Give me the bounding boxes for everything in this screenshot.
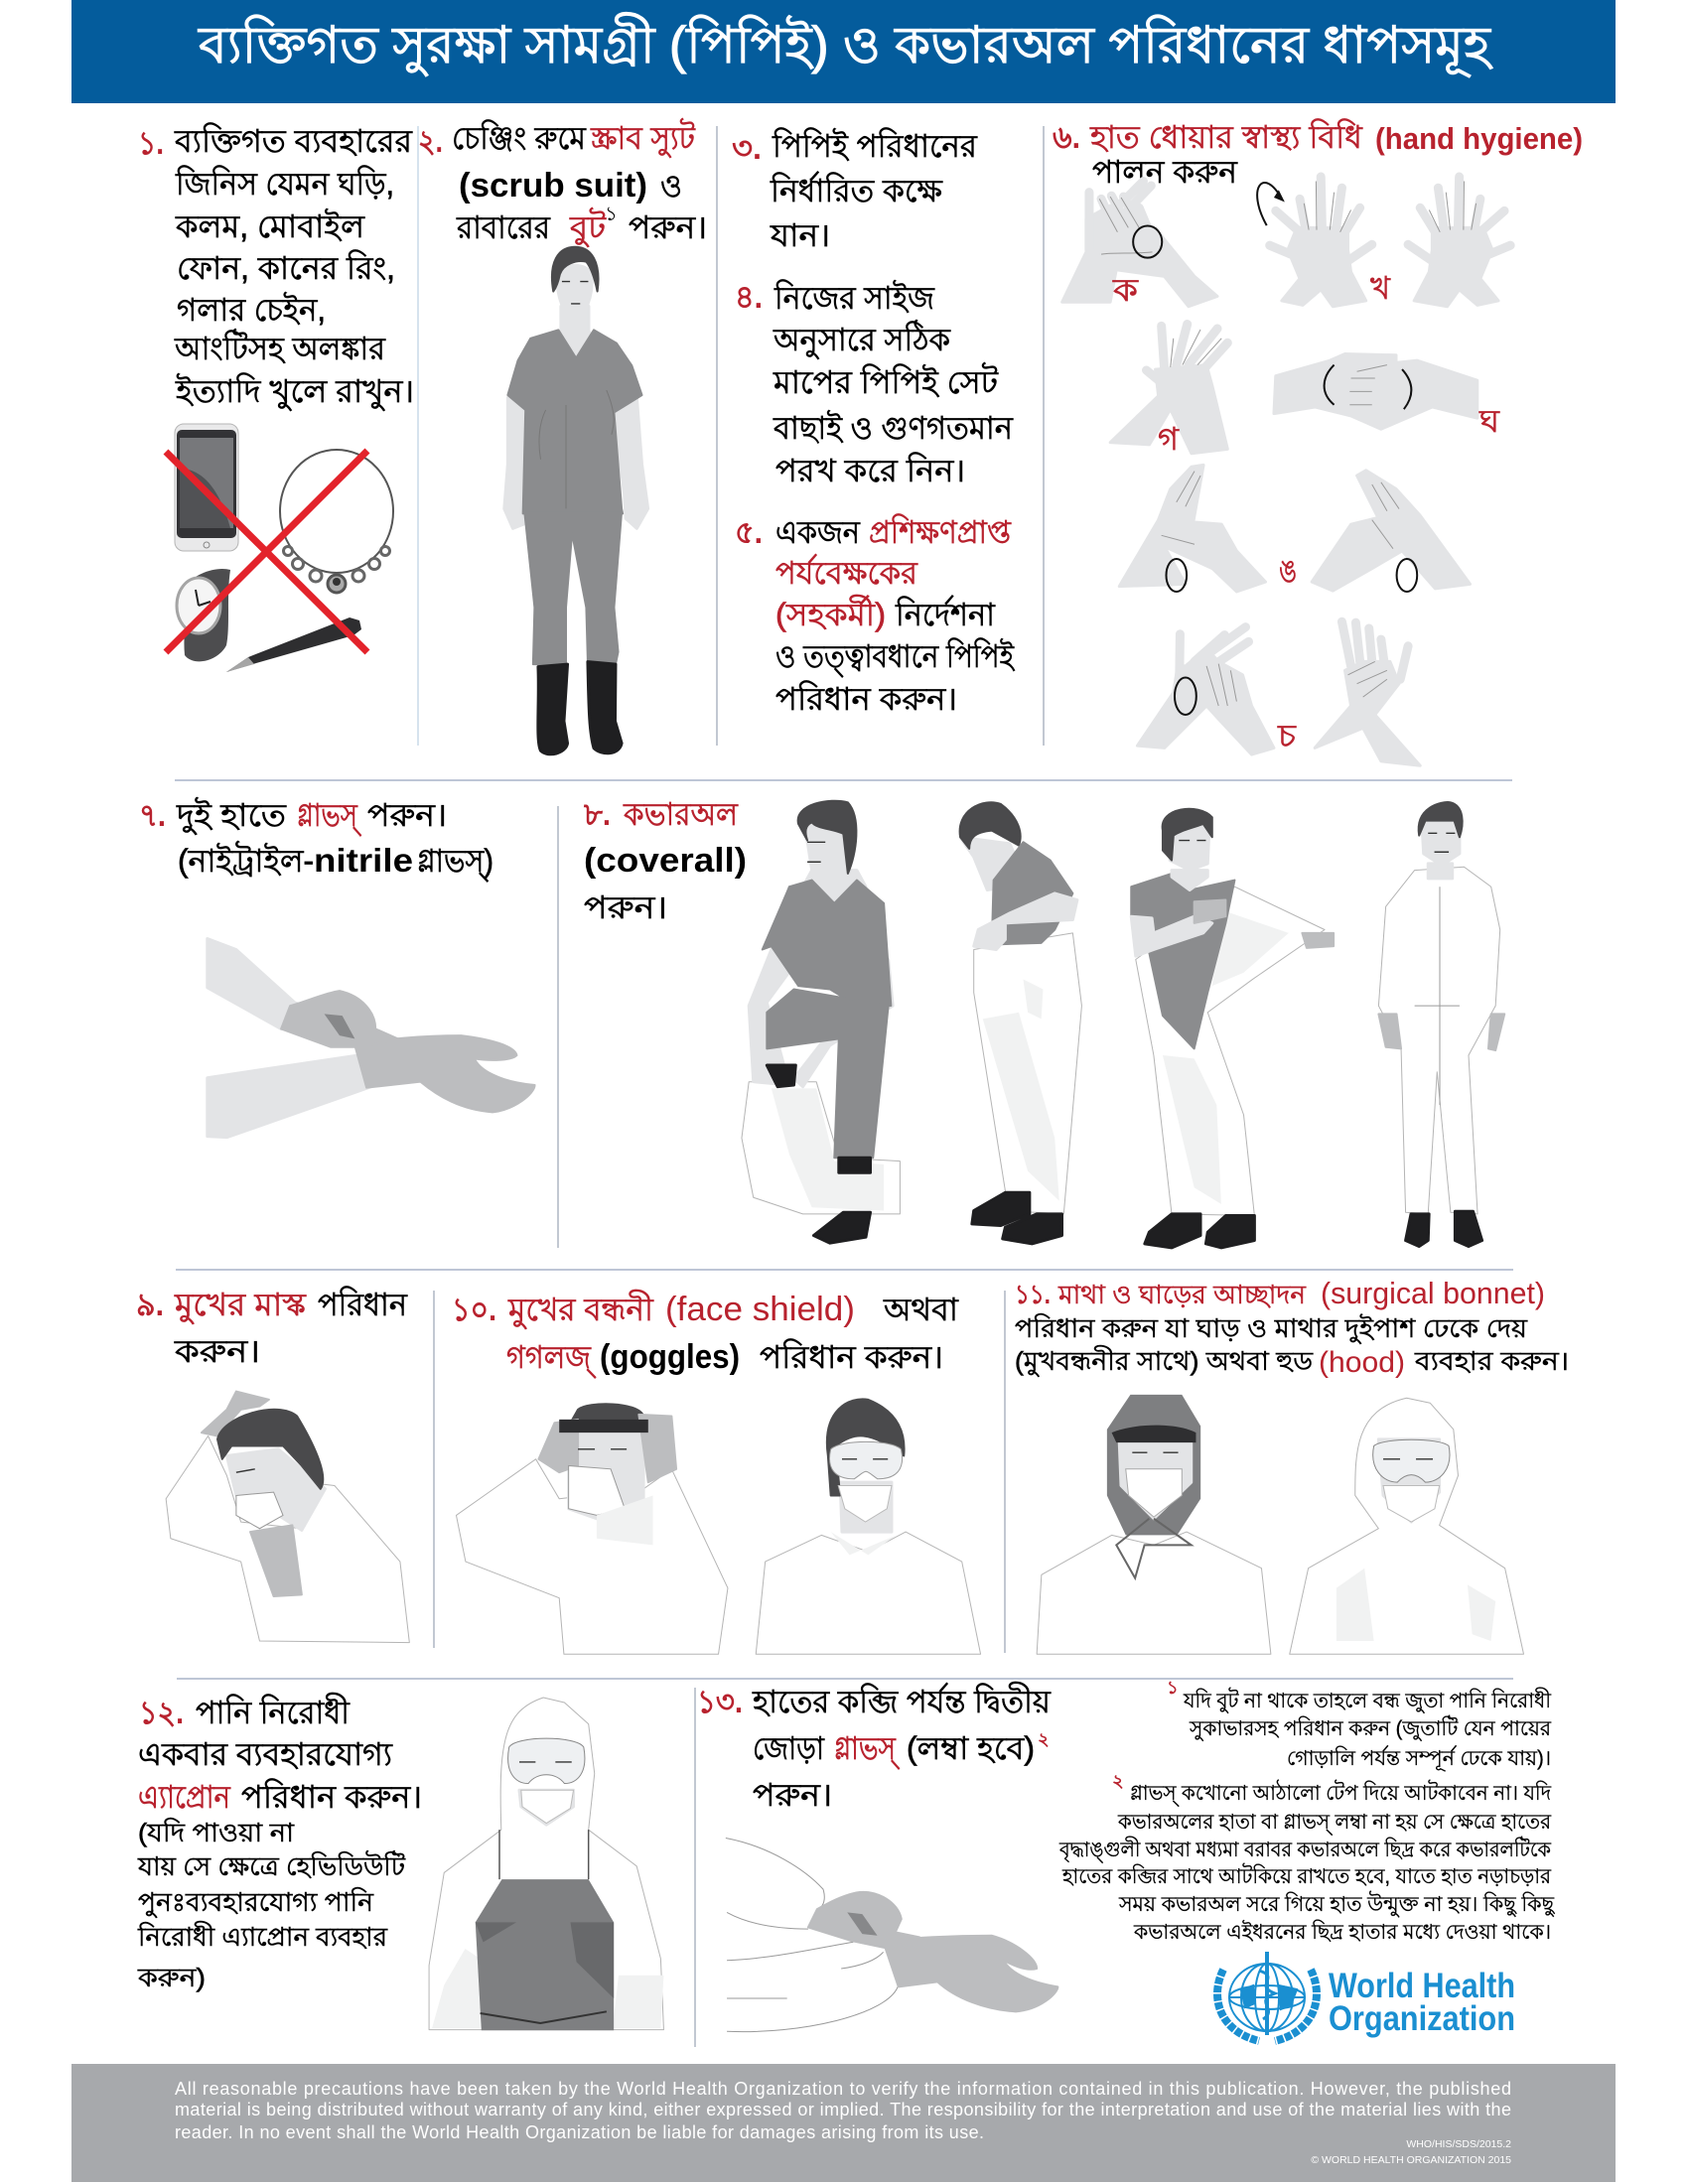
footnotes: হাতের কব্জির সাথে আটকিয়ে রাখতে হবে, যাতে হাত নড়াচড়ার: [1061, 1863, 1551, 1888]
panel: step 1 remove personal items: [138, 122, 414, 672]
step 13 text: পরুন।: [753, 1777, 832, 1813]
step 10 text: [452, 1290, 959, 1378]
step 2 text: ১: [605, 204, 618, 225]
step 2 text: বুট: [569, 207, 607, 247]
step 5 text: ৫.: [735, 514, 763, 550]
step 13 text: গ্লাভস্: [834, 1730, 901, 1769]
step 4 text: বাছাই ও গুণগতমান: [773, 410, 1014, 446]
footnotes: [1058, 1678, 1555, 1944]
footnotes: কভারঅলের হাতা বা গ্লাভস্ লম্বা না হয় সে ক্ষেত্রে হাতের: [1117, 1811, 1551, 1836]
footnotes: ১: [1167, 1678, 1179, 1698]
step 2 text: রাবারের: [456, 209, 551, 245]
illustration: four stages of putting on coverall: [742, 801, 1504, 1248]
step 10 text: ১০.: [452, 1292, 496, 1327]
logo: World Health Organization: Organization: [1329, 1999, 1515, 2038]
step 8 text: (coverall): [584, 842, 747, 880]
footer disclaimer band: All reasonable precautions have been taken by the World Health Organization to verify the information contained in this publication. However, the published: [175, 2079, 1511, 2099]
hand step gha: [1274, 353, 1477, 429]
icon: WHO emblem: [1217, 1952, 1317, 2041]
step 5 text: [735, 513, 1015, 717]
step 11 text: [1015, 1276, 1569, 1379]
step 12 text: (যদি পাওয়া না: [138, 1818, 294, 1847]
footnotes: সময় কভারঅল সরে গিয়ে হাত উন্মুক্ত না হয়। কিছু কিছু: [1118, 1891, 1555, 1917]
step 12 text: [137, 1693, 422, 1992]
icon: necklace: [280, 450, 393, 593]
step 11 text: (মুখবন্ধনীর সাথে) অথবা হুড: [1015, 1345, 1314, 1377]
step 12 text: যায় সে ক্ষেত্রে হেভিডিউটি: [137, 1850, 406, 1881]
step 5 text: একজন: [775, 514, 861, 550]
step 3 text: [732, 127, 978, 253]
step 10 text: মুখের বন্ধনী: [507, 1290, 654, 1329]
step 12 text: নিরোধী এ্যাপ্রোন ব্যবহার: [137, 1921, 388, 1952]
hand step letters: [1112, 270, 1500, 753]
icon: forbidden personal items: [166, 424, 393, 672]
step 1 text: ফোন, কানের রিং,: [177, 249, 395, 286]
step 5 text: পরিধান করুন।: [775, 680, 957, 717]
illustration: hands donning gloves: [208, 939, 535, 1138]
footnotes: ২: [1112, 1771, 1124, 1791]
panel: step 11 surgical bonnet or hood: [1015, 1276, 1569, 1654]
footer disclaimer band: © WORLD HEALTH ORGANIZATION 2015: [1311, 2154, 1511, 2166]
step 7 text: ৭.: [139, 797, 166, 833]
step 1 text: ১.: [138, 125, 164, 161]
icon: pen: [226, 617, 361, 672]
step 12 text: ১২.: [139, 1695, 184, 1730]
figure: fully dressed in coverall: [1378, 802, 1504, 1247]
hand step letters: খ: [1370, 270, 1391, 306]
step 6 heading: হাত ধোয়ার স্বাস্থ্য বিধি: [1089, 118, 1363, 155]
figure: person wearing goggles: [756, 1399, 981, 1654]
logo: World Health Organization: [1217, 1952, 1515, 2041]
step 8 text: কভারঅল: [623, 796, 739, 832]
step 10 text: অথবা: [883, 1292, 959, 1327]
panel: steps 3 to 5: [732, 127, 1015, 717]
step 4 text: নিজের সাইজ: [774, 279, 935, 316]
title banner: [71, 0, 1616, 103]
step 11 text: (hood): [1319, 1346, 1405, 1379]
panel: step 6 hand hygiene: [1053, 118, 1583, 765]
figure: pulling coverall up over legs: [960, 802, 1081, 1244]
step 5 text: ও তত্ত্বাবধানে পিপিই: [775, 637, 1015, 677]
step 6 heading: (hand hygiene): [1375, 121, 1583, 156]
step 13 text: (লম্বা হবে): [907, 1730, 1035, 1766]
step 4 text: মাপের পিপিই সেট: [773, 362, 999, 400]
step 1 text: ব্যক্তিগত ব্যবহারের: [174, 122, 413, 159]
hand step kha: [1257, 177, 1510, 307]
panel: step 12 waterproof apron: [137, 1693, 663, 2030]
figure: person wearing apron: [429, 1698, 663, 2030]
panel: step 2 scrub suit and boots: [418, 118, 707, 754]
figure: person in scrub suit and boots: [504, 247, 648, 754]
figure: person fitting face shield: [456, 1404, 728, 1654]
step 9 text: মুখের মাস্ক: [174, 1287, 307, 1324]
figure: stepping into coverall: [742, 801, 900, 1243]
panel: step 8 coverall: [583, 796, 1504, 1248]
footer disclaimer band: [71, 2064, 1616, 2182]
step 11 text: মাথা ও ঘাড়ের আচ্ছাদন: [1057, 1280, 1306, 1309]
hand step ka: [1062, 182, 1217, 307]
icon: wristwatch: [177, 569, 230, 661]
step 5 text: পর্যবেক্ষকের: [775, 554, 918, 591]
step 8 text: ৮.: [583, 796, 611, 832]
step 11 text: (surgical bonnet): [1321, 1276, 1545, 1310]
figure: person fitting face mask: [166, 1392, 409, 1643]
step 2 text: [418, 118, 707, 247]
footnotes: যদি বুট না থাকে তাহলে বন্ধ জুতা পানি নিরোধী: [1183, 1688, 1552, 1713]
step 13 text: [697, 1682, 1052, 1813]
footnotes: সুকাভারসহ পরিধান করুন (জুতাটি যেন পায়ের: [1189, 1715, 1551, 1741]
step 13 text: ২: [1038, 1729, 1050, 1749]
step 12 text: পরিধান করুন।: [241, 1778, 422, 1815]
step 10 text: (goggles): [600, 1338, 740, 1376]
step 13 text: ১৩.: [697, 1684, 743, 1719]
step 2 text: স্ক্রাব স্যুট: [590, 118, 696, 158]
step 4 text: অনুসারে সঠিক: [773, 320, 951, 359]
step 7 text: গ্লাভস্): [417, 843, 493, 882]
hand step cha: [1137, 621, 1420, 765]
hand step letters: গ: [1158, 421, 1180, 457]
step 7 text: (নাইট্রাইল-: [178, 841, 314, 879]
step 11 text: পরিধান করুন যা ঘাড় ও মাথার দুইপাশ ঢেকে দেয়: [1015, 1313, 1528, 1344]
footer disclaimer band: material is being distributed without warranty of any kind, either expressed or implied. The responsibility for the interpretation and use of the material lies with the: [175, 2100, 1511, 2119]
illustration: second glove pulled over coverall cuff: [726, 1838, 1057, 2032]
step 3 text: নির্ধারিত কক্ষে: [770, 172, 943, 208]
hand step letters: চ: [1277, 718, 1297, 753]
footnotes: কভারঅলে এইধরনের ছিদ্র হাতার মধ্যে দেওয়া থাকে।: [1133, 1920, 1551, 1944]
figure: person wearing hood and face shield: [1037, 1395, 1271, 1654]
panel: step 9 face mask: [136, 1286, 409, 1643]
step 13 text: জোড়া: [753, 1730, 825, 1766]
panel: step 7 gloves: [139, 797, 535, 1138]
icon: phone: [175, 424, 238, 551]
illustration: hand washing steps: [1062, 177, 1510, 765]
panel: step 13 second pair of gloves: [697, 1682, 1057, 2032]
step 2 text: (scrub suit): [459, 167, 647, 205]
step 10 text: (face shield): [665, 1291, 855, 1328]
step 7 text: [139, 797, 493, 882]
red cross: [166, 451, 367, 652]
step 8 text: পরুন।: [584, 889, 667, 925]
step 5 text: নির্দেশনা: [895, 596, 996, 632]
step 2 text: ২.: [418, 123, 443, 159]
step 11 text: ব্যবহার করুন।: [1414, 1346, 1569, 1376]
footnotes: বৃদ্ধাঙ্গুলী অথবা মধ্যমা বরাবর কভারঅলে ছিদ্র করে কভারলটিকে: [1058, 1837, 1551, 1863]
step 8 text: [583, 796, 747, 925]
step 5 text: (সহকর্মী): [775, 595, 886, 632]
step 6 heading: পালন করুন: [1092, 154, 1238, 190]
hand step nga: [1119, 465, 1471, 592]
step 2 text: চেঞ্জিং রুমে: [452, 119, 587, 156]
step 10 text: গগলজ্: [506, 1339, 597, 1378]
step 6 heading: [1053, 118, 1583, 190]
step 7 text: গ্লাভস্: [297, 797, 362, 836]
step 9 text: [136, 1286, 408, 1369]
footer disclaimer band: reader. In no event shall the World Health Organization be liable for damages arising from its use.: [175, 2122, 984, 2142]
step 12 text: পুনঃব্যবহারযোগ্য পানি: [138, 1887, 373, 1918]
footnotes: গোড়ালি পর্যন্ত সম্পূর্ন ঢেকে যায়)।: [1287, 1745, 1551, 1771]
step 7 text: দুই হাতে: [176, 797, 287, 835]
step 9 text: করুন।: [174, 1333, 260, 1369]
step 5 text: প্রশিক্ষণপ্রাপ্ত: [869, 513, 1012, 550]
step 7 text: nitrile: [314, 842, 413, 879]
step 11 text: ১১.: [1015, 1280, 1051, 1309]
step 3 text: যান।: [770, 217, 830, 253]
step 4 text: পরখ করে নিন।: [775, 452, 965, 488]
step 2 text: ও: [660, 168, 682, 204]
hand step letters: ঙ: [1279, 553, 1297, 589]
step 1 text: আংটিসহ অলঙ্কার: [174, 329, 386, 366]
logo: World Health Organization: World Health: [1329, 1967, 1515, 2005]
step 12 text: এ্যাপ্রোন: [138, 1779, 231, 1815]
hand step letters: ঘ: [1478, 403, 1500, 439]
hand step ga: [1110, 325, 1227, 454]
step 9 text: ৯.: [136, 1287, 164, 1322]
step 2 text: পরুন।: [629, 209, 707, 245]
footnotes: গ্লাভস্ কখোনো আঠালো টেপ দিয়ে আটকাবেন না। যদি: [1130, 1780, 1552, 1807]
step 3 text: পিপিই পরিধানের: [772, 127, 978, 164]
step 10 text: পরিধান করুন।: [760, 1338, 943, 1375]
step 13 text: হাতের কব্জি পর্যন্ত দ্বিতীয়: [752, 1682, 1052, 1719]
step 4 text: [735, 279, 1014, 488]
figure: pulling coverall onto arms: [1131, 809, 1334, 1248]
step 12 text: পানি নিরোধী: [196, 1693, 351, 1730]
step 1 text: গলার চেইন,: [177, 292, 326, 328]
step 9 text: পরিধান: [318, 1286, 408, 1322]
panel: step 10 face shield or goggles: [452, 1290, 981, 1654]
hand step letters: ক: [1112, 272, 1139, 308]
step 3 text: ৩.: [732, 130, 762, 166]
step 1 text: ইত্যাদি খুলে রাখুন।: [175, 372, 414, 411]
step 1 text: [138, 122, 414, 411]
figure: person wearing hood and goggles: [1290, 1398, 1524, 1654]
footer disclaimer band: WHO/HIS/SDS/2015.2: [1406, 2138, 1511, 2150]
step 7 text: পরুন।: [367, 797, 447, 833]
step 12 text: করুন): [137, 1963, 206, 1992]
title banner: ব্যক্তিগত সুরক্ষা সামগ্রী (পিপিই) ও কভারঅল পরিধানের ধাপসমূহ: [198, 13, 1493, 76]
step 1 text: জিনিস যেমন ঘড়ি,: [175, 165, 394, 202]
step 6 heading: ৬.: [1053, 119, 1080, 155]
step 4 text: ৪.: [735, 279, 763, 315]
step 1 text: কলম, মোবাইল: [175, 208, 365, 244]
step 12 text: একবার ব্যবহারযোগ্য: [138, 1736, 393, 1772]
